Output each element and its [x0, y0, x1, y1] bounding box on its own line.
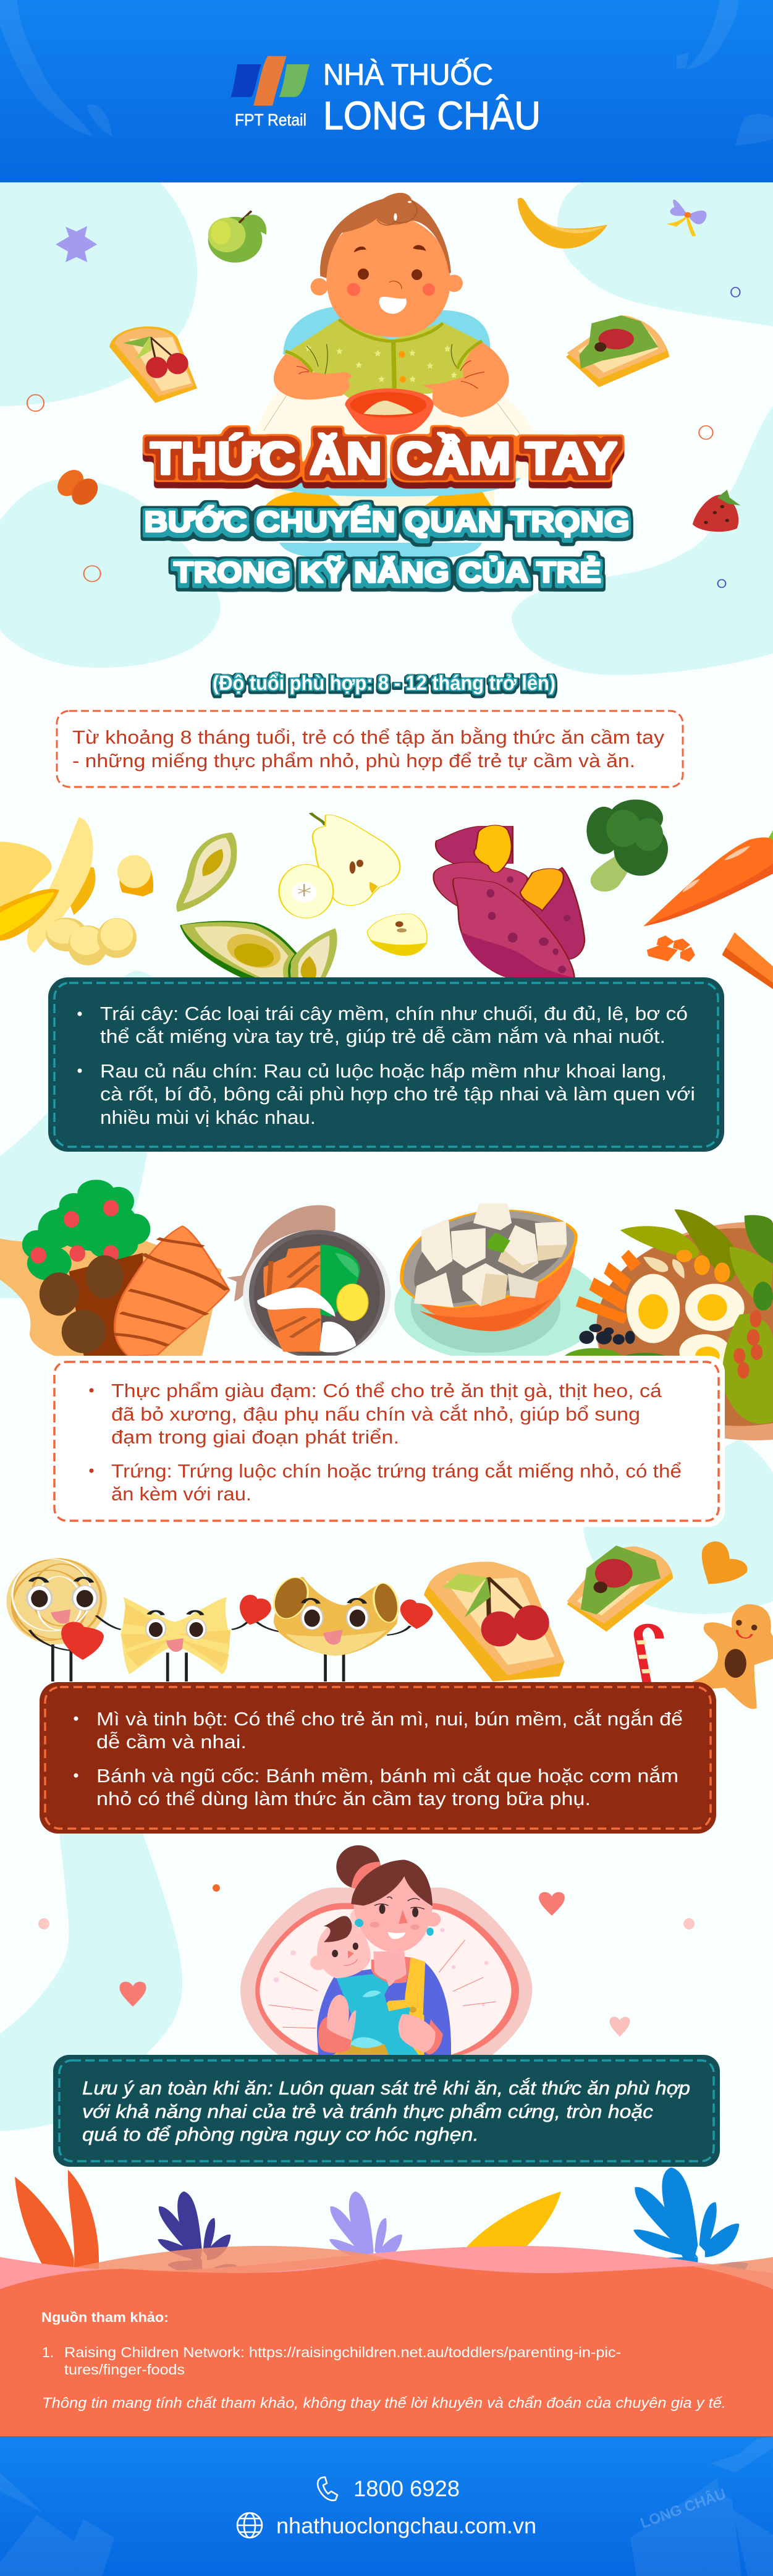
heart cookie	[702, 1541, 748, 1584]
tofu bowl	[394, 1204, 604, 1362]
bullets	[89, 1388, 94, 1473]
footer band	[0, 2436, 773, 2576]
logo name line 2: LONG CHÂU	[323, 93, 541, 138]
dots	[38, 1884, 695, 1929]
illustration: protein foods	[0, 1180, 773, 1440]
icon: globe	[237, 2513, 262, 2538]
icon: banana	[518, 198, 607, 249]
fruit text: thể cắt miếng vừa tay trẻ, giúp trẻ dễ cầm nắm và nhai nuốt.	[100, 1026, 665, 1047]
icon: hearts and dots	[38, 1884, 695, 2037]
panel: pasta and bread	[40, 1682, 716, 1834]
bullets	[78, 1011, 82, 1073]
blue plant	[633, 2167, 748, 2274]
candy cane	[638, 1626, 659, 1683]
illustration: fruit and vegetables	[0, 799, 773, 989]
pasta text: dễ cầm và nhai.	[96, 1731, 247, 1753]
arms	[274, 354, 353, 400]
references heading: Nguồn tham khảo:	[41, 2310, 169, 2325]
icon: bow	[667, 200, 706, 237]
protein text: ăn kèm với rau.	[111, 1483, 251, 1505]
fruit text: cà rốt, bí đỏ, bông cải phù hợp cho trẻ tập nhai và làm quen với	[100, 1083, 695, 1105]
icon: rings	[27, 287, 740, 587]
mother	[317, 1845, 451, 2055]
heart	[119, 1982, 146, 2007]
heart	[539, 1892, 565, 1916]
references	[41, 2310, 726, 2412]
sweet potato	[434, 825, 585, 978]
protein text: Trứng: Trứng luộc chín hoặc trứng tráng cắt miếng nhỏ, có thể	[111, 1460, 682, 1482]
fruit text: nhiều mùi vị khác nhau.	[100, 1107, 316, 1128]
icon: star	[56, 226, 97, 262]
avocado halves	[176, 833, 337, 978]
footer decoration	[0, 2436, 773, 2576]
heart	[609, 2017, 630, 2037]
illustration: hero decorations	[27, 198, 740, 587]
safety text: Lưu ý an toàn khi ăn: Luôn quan sát trẻ khi ăn, cắt thức ăn phù hợp	[82, 2077, 690, 2099]
baby	[310, 1916, 418, 2055]
bullets	[74, 1716, 78, 1778]
carrot pieces	[647, 932, 773, 989]
fish and salmon plate	[227, 1205, 391, 1358]
halo	[240, 1887, 532, 2055]
phone	[318, 2476, 460, 2501]
fruit text: Trái cây: Các loại trái cây mềm, chín như chuối, đu đủ, lê, bơ có	[100, 1003, 688, 1024]
high chair lower parts	[254, 470, 525, 560]
website url: nhathuoclongchau.com.vn	[276, 2513, 536, 2538]
macaroni character	[269, 1577, 433, 1681]
icon: almonds	[53, 467, 103, 508]
illustration: baby in high chair	[247, 193, 544, 560]
illustration: plants	[15, 2167, 748, 2274]
mother hands	[318, 1995, 443, 2054]
reference item: Raising Children Network: https://raisingchildren.net.au/toddlers/parenting-in-pic-	[64, 2344, 621, 2360]
pasta text: Mì và tinh bột: Có thể cho trẻ ăn mì, nui, bún mềm, cắt ngắn để	[96, 1708, 683, 1730]
orange leaves	[15, 2170, 99, 2271]
intro text: - những miếng thực phẩm nhỏ, phù hợp để trẻ tự cầm và ăn.	[72, 750, 635, 772]
navy plant	[158, 2191, 237, 2273]
logo mark	[230, 56, 310, 106]
illustration: mother holding baby	[240, 1845, 532, 2055]
disclaimer: Thông tin mang tính chất tham khảo, không thay thế lời khuyên và chẩn đoán của chuyên gia y tế.	[42, 2395, 726, 2412]
broccoli	[586, 799, 668, 891]
pasta text: Bánh và ngũ cốc: Bánh mềm, bánh mì cắt que hoặc cơm nắm	[96, 1765, 678, 1787]
bowl	[345, 388, 434, 435]
chair back	[283, 307, 490, 354]
sign text: LONG CHÂU	[638, 2485, 729, 2532]
carrot	[643, 830, 773, 926]
gingerbread man	[693, 1604, 773, 1709]
panel: protein	[47, 1356, 725, 1527]
reference item: tures/finger-foods	[64, 2361, 185, 2378]
subtitle line 3: TRONG KỸ NĂNG CỦA TRẺ	[174, 556, 601, 589]
pear	[279, 813, 427, 956]
lilac plant	[329, 2191, 408, 2273]
icon: apple	[208, 211, 266, 263]
illustration: pasta characters and snacks	[6, 1541, 773, 1709]
cherry toast	[424, 1562, 564, 1681]
logo name line 1: NHÀ THUỐC	[323, 57, 493, 91]
protein text: đạm trong giai đoạn phát triển.	[111, 1426, 399, 1448]
phone number: 1800 6928	[353, 2476, 460, 2501]
panel: intro	[49, 706, 689, 792]
logo	[230, 56, 541, 138]
header band	[0, 0, 773, 182]
pasta text: nhỏ có thể dùng làm thức ăn cầm tay trong bữa phụ.	[96, 1788, 591, 1809]
tray	[247, 388, 544, 478]
safety text: với khả năng nhai của trẻ và tránh thực phẩm cứng, tròn hoặc	[82, 2101, 654, 2122]
footer waves	[0, 2246, 773, 2436]
bow pasta character	[120, 1595, 285, 1681]
reference item: 1.	[42, 2344, 54, 2360]
icon: ladybug toast	[566, 315, 669, 387]
icon: phone	[318, 2477, 337, 2501]
safety text: quá to để phòng ngừa nguy cơ hóc nghẹn.	[82, 2123, 479, 2145]
face	[358, 268, 369, 279]
panel: fruit and vegetables	[48, 977, 724, 1152]
logo small text: FPT Retail	[235, 111, 306, 129]
fruit text: Rau củ nấu chín: Rau củ luộc hoặc hấp mềm như khoai lang,	[100, 1060, 667, 1082]
title	[144, 433, 630, 589]
noodle nest character	[6, 1558, 120, 1681]
panel: safety note	[53, 2055, 720, 2167]
website	[237, 2513, 536, 2538]
age note: (Độ tuổi phù hợp: 8 - 12 tháng trở lên)	[213, 671, 555, 694]
eggs and salad plate	[564, 1209, 773, 1440]
shirt	[284, 320, 482, 397]
meat and salmon board	[0, 1180, 229, 1356]
protein text: đã bỏ xương, đậu phụ nấu chín và cắt nhỏ, giúp bổ sung	[111, 1403, 640, 1425]
yellow leaf	[466, 2191, 561, 2250]
subtitle line 2: BƯỚC CHUYỂN QUAN TRỌNG	[144, 505, 630, 538]
title line 1: THỨC ĂN CẦM TAY	[150, 433, 617, 484]
banana	[0, 817, 153, 966]
icon: strawberry	[693, 490, 740, 532]
background blobs	[0, 182, 773, 2131]
intro text: Từ khoảng 8 tháng tuổi, trẻ có thể tập ăn bằng thức ăn cầm tay	[72, 726, 665, 748]
ladybug toast	[567, 1545, 673, 1631]
protein text: Thực phẩm giàu đạm: Có thể cho trẻ ăn thịt gà, thịt heo, cá	[111, 1380, 662, 1401]
head	[311, 278, 328, 295]
icon: cherry toast	[109, 326, 197, 403]
